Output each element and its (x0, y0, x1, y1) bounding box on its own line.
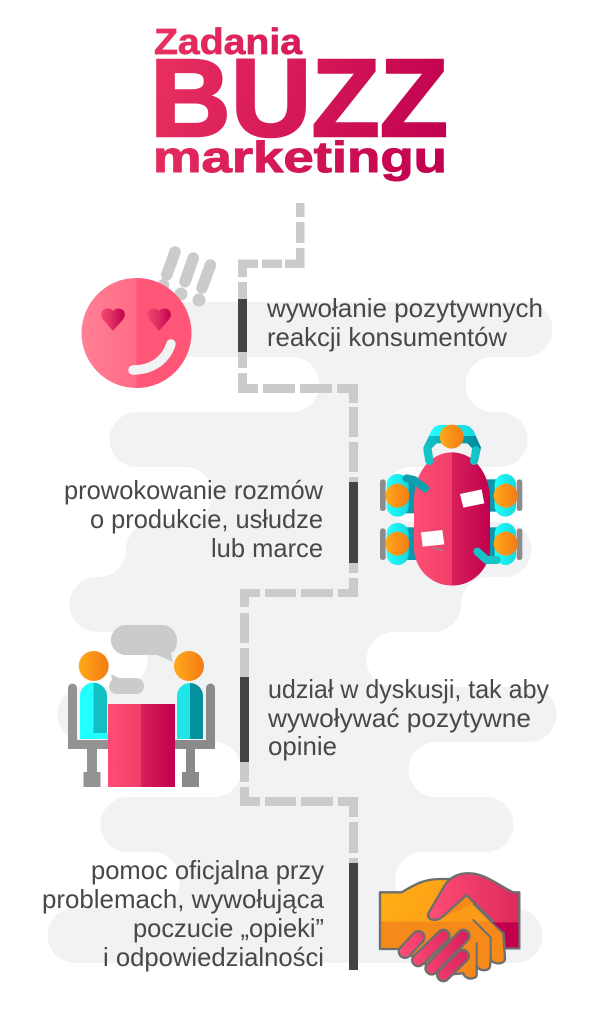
face right half (136, 278, 192, 388)
text: step 1: wywołanie pozytywnych (266, 293, 543, 323)
text: step 2: prowokowanie rozmów (64, 475, 323, 505)
person: top (423, 425, 481, 464)
text: step 4: poczucie „opieki” (133, 913, 324, 943)
person: upper left (385, 474, 418, 517)
large speech bubble (111, 625, 177, 662)
step marker 1 (238, 299, 247, 352)
orange hand outline (380, 879, 505, 979)
text: step 3: opinie (268, 731, 337, 761)
right head (174, 651, 204, 681)
table left half (108, 704, 142, 787)
right person body (177, 683, 190, 739)
text: step 2 (64, 475, 323, 563)
pen (433, 548, 443, 551)
title line: BUZZ: BUZZ (150, 37, 448, 160)
background blob (48, 302, 556, 963)
step marker 2 (349, 482, 358, 563)
orange hand lower shade (381, 922, 504, 978)
paper left (421, 530, 444, 547)
person: upper right (487, 474, 518, 517)
icon: handshake (380, 873, 519, 979)
arms on table (407, 450, 497, 560)
title line: marketingu: marketingu (153, 133, 447, 182)
right heart eye (147, 308, 171, 331)
step marker 3 (240, 677, 249, 762)
text: step 3: wywoływać pozytywne (267, 703, 531, 733)
text: step 1 (266, 293, 543, 352)
icon: smiling face with heart eyes (82, 252, 210, 388)
icon: two people talking at a table (68, 625, 215, 787)
text: step 4 (42, 855, 325, 972)
text: step 4: problemach, wywołująca (42, 884, 325, 914)
small speech bubble (109, 674, 144, 694)
orange hand (380, 879, 505, 979)
face (82, 278, 136, 388)
chairs (380, 479, 522, 560)
red hand (428, 873, 519, 948)
right chair (172, 684, 215, 787)
title (150, 21, 448, 182)
smile (133, 344, 171, 370)
pink fingers (405, 936, 463, 975)
left heart eye (101, 308, 125, 331)
red hand cuff shade (492, 922, 518, 947)
left person body (80, 682, 110, 739)
table right half (141, 704, 175, 787)
person: lower left (385, 523, 418, 565)
step marker 4 (349, 863, 358, 970)
title line: Zadania: Zadania (154, 21, 303, 62)
shadow under red hand (443, 896, 474, 917)
table left half (414, 452, 452, 586)
text: step 2: lub marce (211, 533, 323, 563)
text: step 4: pomoc oficjalna przy (91, 855, 324, 885)
dashed connector line (238, 203, 358, 868)
text: step 3 (267, 674, 549, 761)
text: step 1: reakcji konsumentów (267, 322, 507, 352)
paper right (460, 489, 484, 508)
right person shading (190, 683, 203, 739)
person: lower right (487, 523, 518, 565)
left head (79, 651, 109, 681)
text: step 3: udział w dyskusji, tak aby (268, 674, 549, 704)
text: step 4: i odpowiedzialności (103, 942, 324, 972)
left person shading (94, 683, 107, 733)
table right half (452, 452, 490, 586)
exclamation marks (157, 252, 210, 306)
finger joints (473, 920, 491, 966)
icon: meeting table seen from above (380, 425, 522, 586)
text: step 2: o produkcie, usłudze (90, 504, 323, 534)
left chair (68, 684, 110, 787)
